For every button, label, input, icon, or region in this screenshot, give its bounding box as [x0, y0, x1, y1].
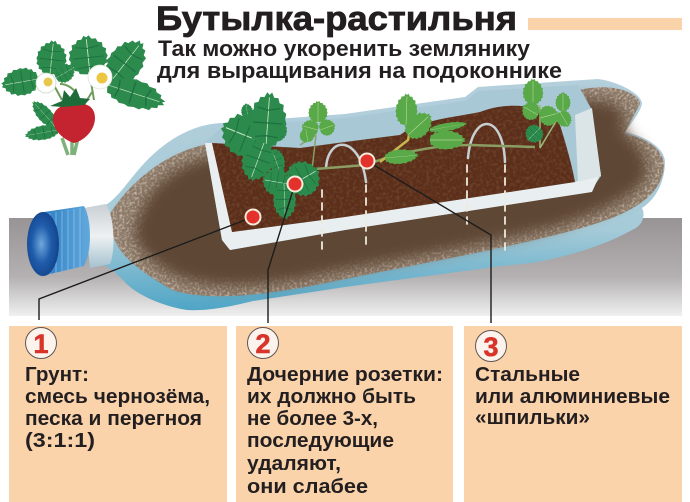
number 1: [26, 328, 56, 359]
panel 2: daughter rosettes: [236, 326, 453, 502]
text 2: их должно быть: [247, 385, 416, 408]
runner stem: [300, 145, 535, 170]
text 1: Грунт:: [25, 363, 89, 386]
text 2: Дочерние розетки:: [247, 363, 443, 386]
illustration: strawberry plant: [0, 31, 169, 155]
mother plant: [214, 91, 289, 186]
marker dots: [246, 154, 374, 224]
number 3: 3: [483, 332, 499, 362]
title accent bar: [528, 18, 682, 30]
text 3: Стальные: [475, 363, 580, 386]
daughter rosette 1: [260, 154, 327, 220]
panel 1: soil: [9, 326, 227, 502]
number 3: [476, 330, 506, 362]
number 2: [248, 328, 278, 359]
text 3: или алюминиевые: [475, 385, 670, 408]
text 2: [247, 363, 443, 498]
title: Бутылка-растильня: [156, 0, 517, 38]
neck: [84, 204, 113, 268]
young rosette at top: [298, 101, 338, 170]
leader lines: [39, 161, 491, 323]
strawberry fruit: [50, 88, 95, 143]
flowers: [36, 65, 112, 93]
hoops: [322, 124, 505, 252]
subtitle: Так можно укоренить землянику: [158, 36, 530, 61]
number 1: 1: [33, 329, 49, 359]
text 1: [25, 363, 210, 452]
text 2: удаляют,: [247, 452, 341, 475]
panel 3: hairpins: [464, 326, 682, 502]
daughter rosette 2: [380, 93, 468, 165]
cap: [27, 206, 90, 276]
number 2: 2: [255, 329, 271, 359]
text 2: не более 3-х,: [247, 407, 378, 430]
text 3: «шпильки»: [475, 406, 590, 429]
background floor: [9, 218, 682, 316]
text 3: [475, 363, 670, 429]
bottle: [27, 79, 665, 310]
text 2: они слабее: [247, 475, 368, 498]
text 1: песка и перегноя: [25, 407, 202, 430]
text 1: смесь чернозёма,: [25, 385, 210, 408]
text 2: последующие: [247, 429, 394, 452]
daughter rosette 3: [518, 79, 575, 148]
cutaway window: [205, 85, 601, 250]
subtitle: [157, 36, 562, 83]
subtitle: для выращивания на подоконнике: [157, 58, 562, 83]
bottle glass body: [104, 79, 665, 310]
outer soil: [110, 87, 664, 296]
text 1: (3:1:1): [25, 429, 95, 452]
potting soil: [212, 106, 575, 232]
